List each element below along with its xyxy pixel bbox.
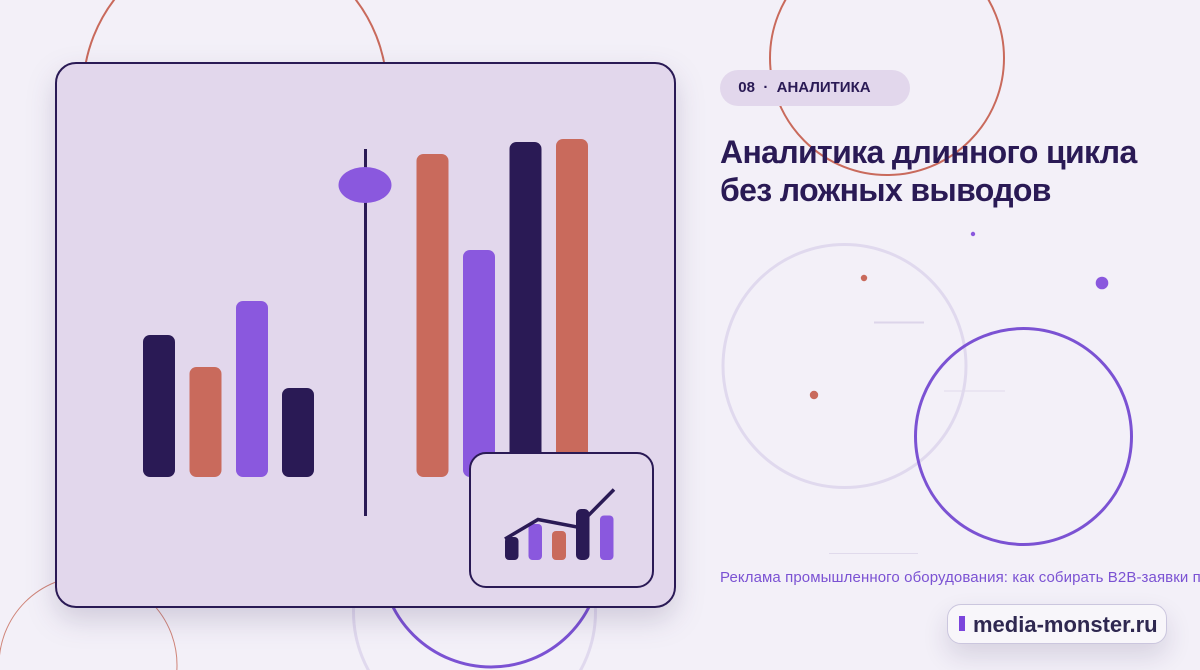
divider with marker [338,149,392,516]
brand badge [947,604,1167,644]
inset: mini chart card [470,453,653,587]
circle: bottom lilac [354,491,596,670]
dot: red lower [810,391,818,399]
circle: top right red [770,0,1004,175]
title: без ложных выводов [720,172,1051,208]
dot: small purple [971,232,975,236]
title: Аналитика длинного цикла [720,134,1137,170]
bar group: right [416,139,588,477]
dot: under panel [318,602,324,608]
tag pill [720,70,910,106]
title [720,134,1138,208]
tag text: 08 · АНАЛИТИКА [738,79,871,96]
circle: large lilac [723,244,966,488]
dot: red upper [861,275,867,281]
circle: top left red [83,0,387,244]
circle: large purple [916,328,1132,544]
brand mark [959,616,965,631]
panel background [56,63,675,607]
brand name: media-monster.ru [973,612,1158,637]
dot: large purple [1096,277,1108,289]
circle: bottom left red [0,576,177,670]
bar group: left [143,301,314,477]
circle: bottom purple [381,447,601,667]
